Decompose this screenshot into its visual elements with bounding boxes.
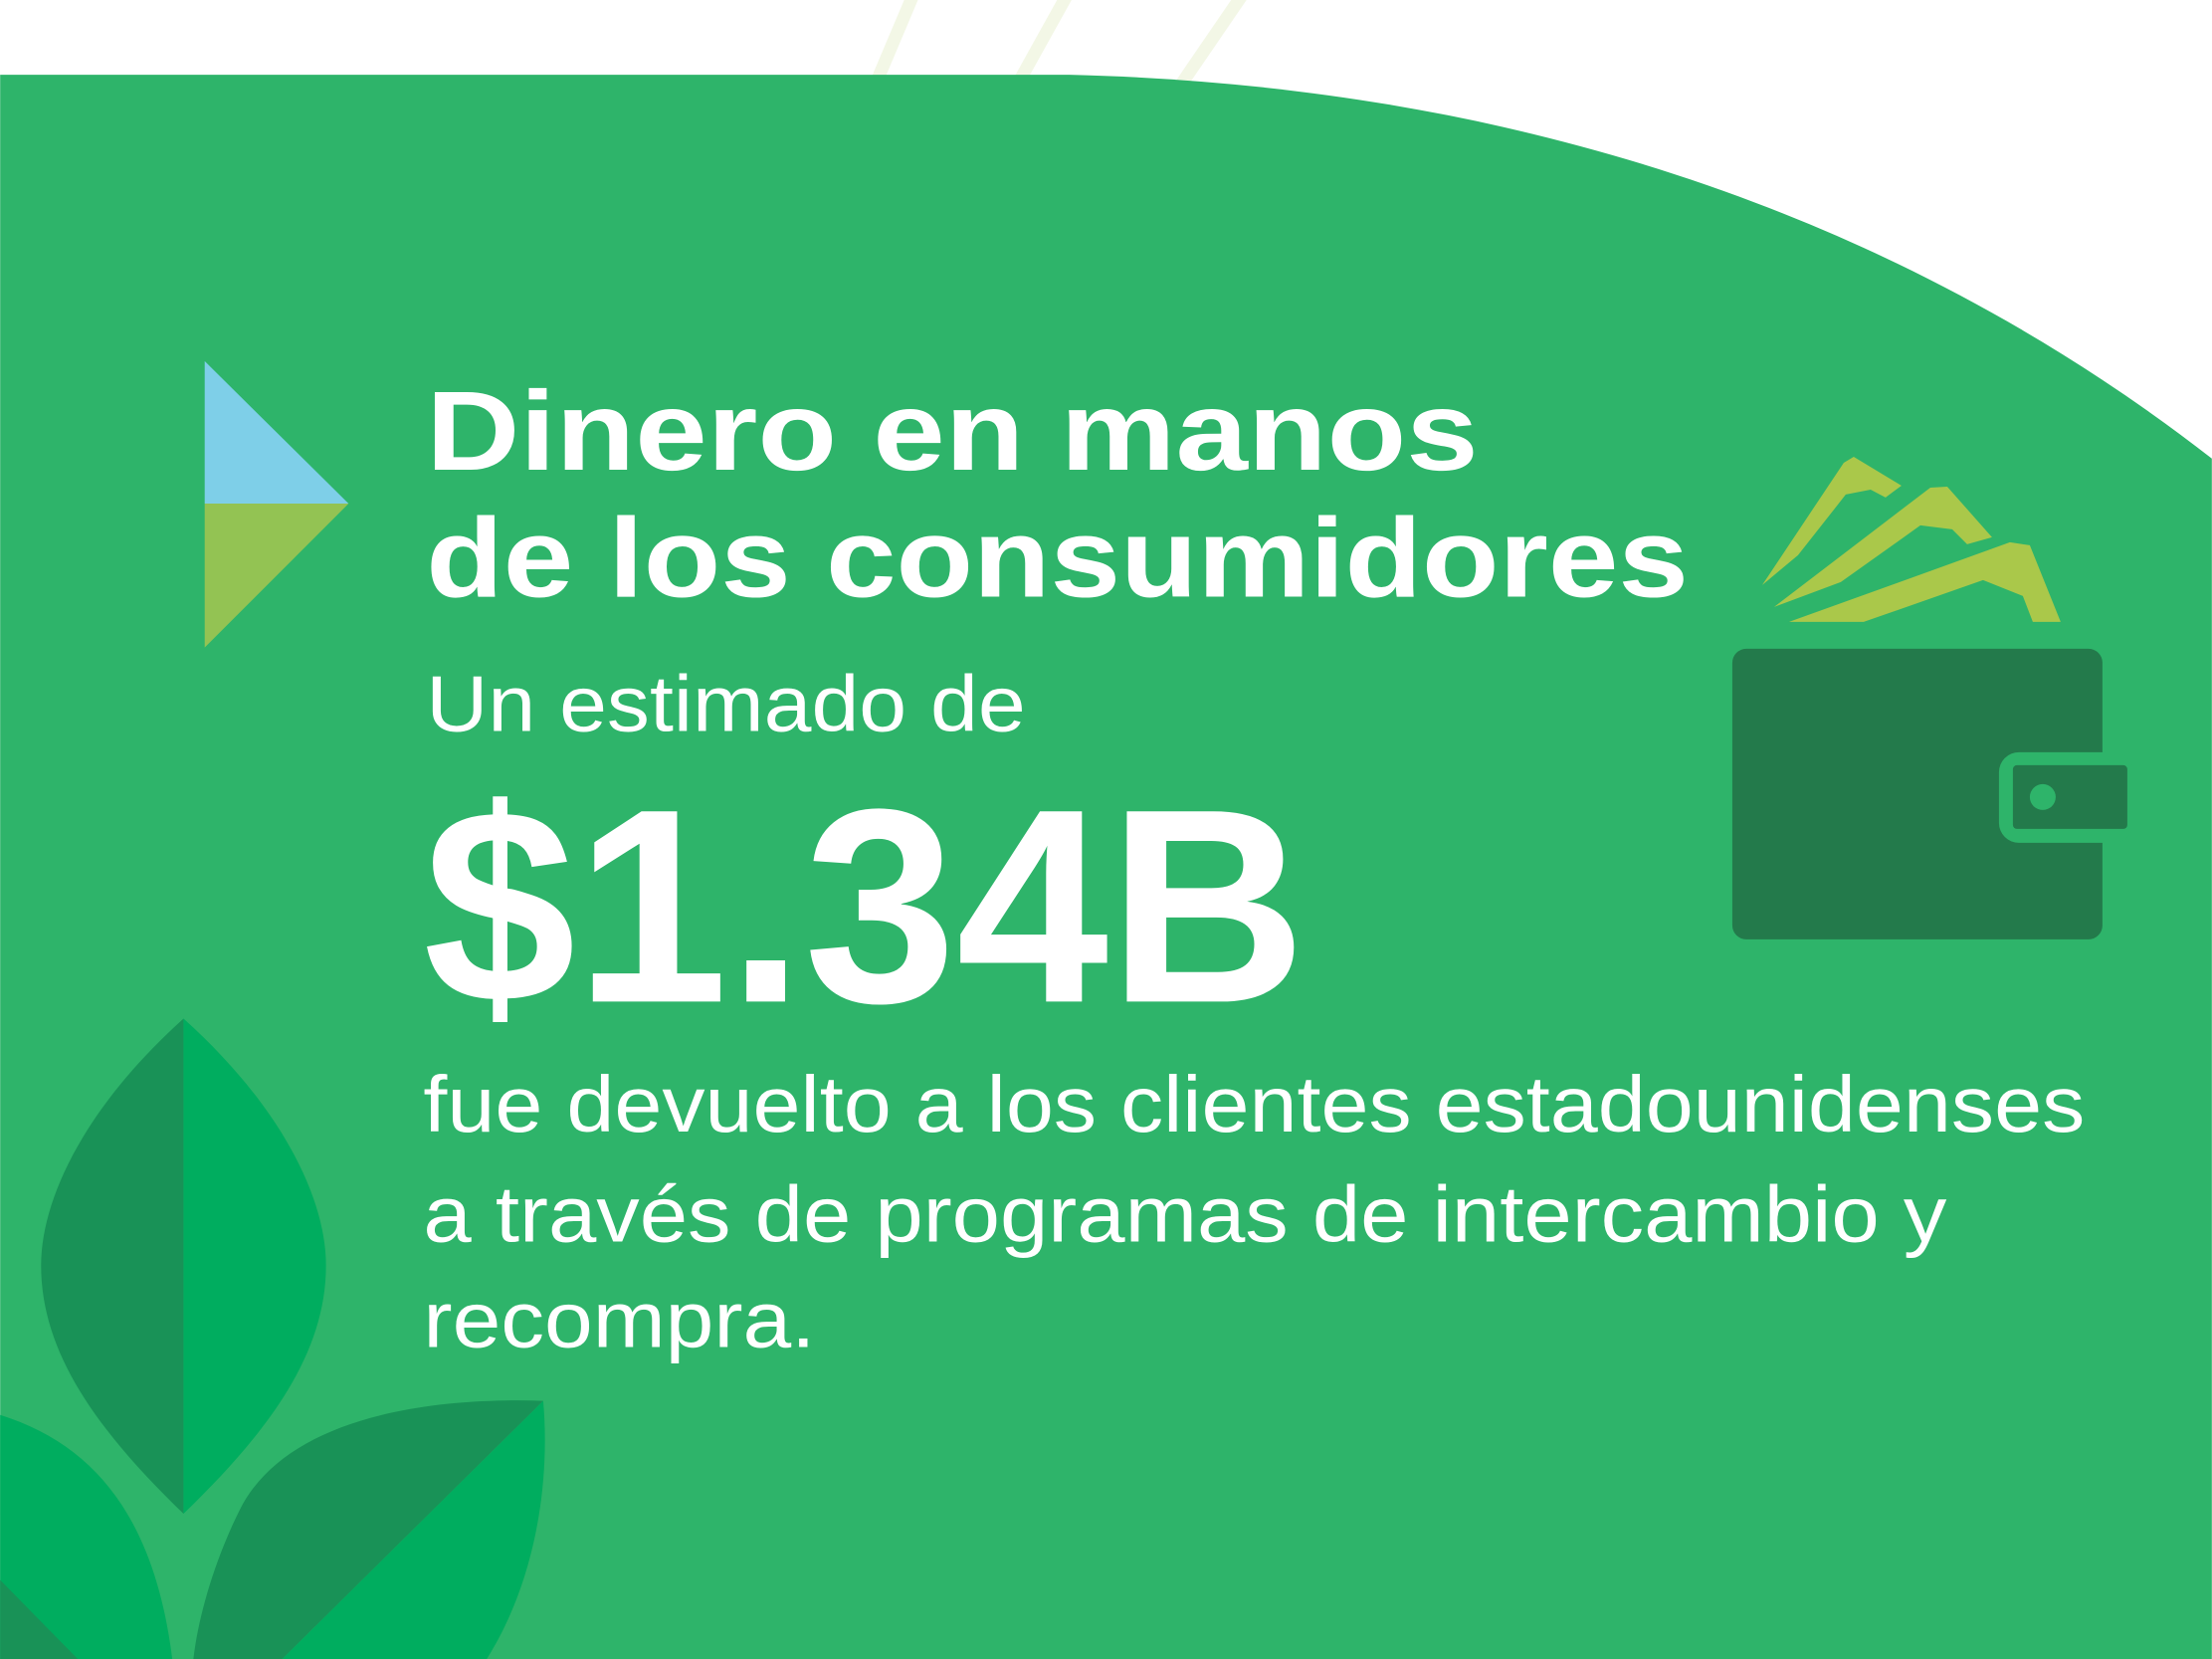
text: description: a través de programas de intercambio y [423,1169,1947,1258]
title: Dinero en manos [426,368,1479,495]
text: description: recompra. [423,1276,815,1364]
title: de los consumidores [426,496,1689,622]
title [426,368,1689,622]
icon: wallet with bills [1732,457,2133,939]
icon: leaves [0,1018,545,1659]
text: description: fue devuelto a los clientes estadounidenses [423,1060,2085,1148]
text: description [423,1060,2085,1364]
icon: logo triangle [205,361,348,648]
big number: $1.34B [423,750,1307,1060]
text: intro: Un estimado de [426,659,1026,747]
